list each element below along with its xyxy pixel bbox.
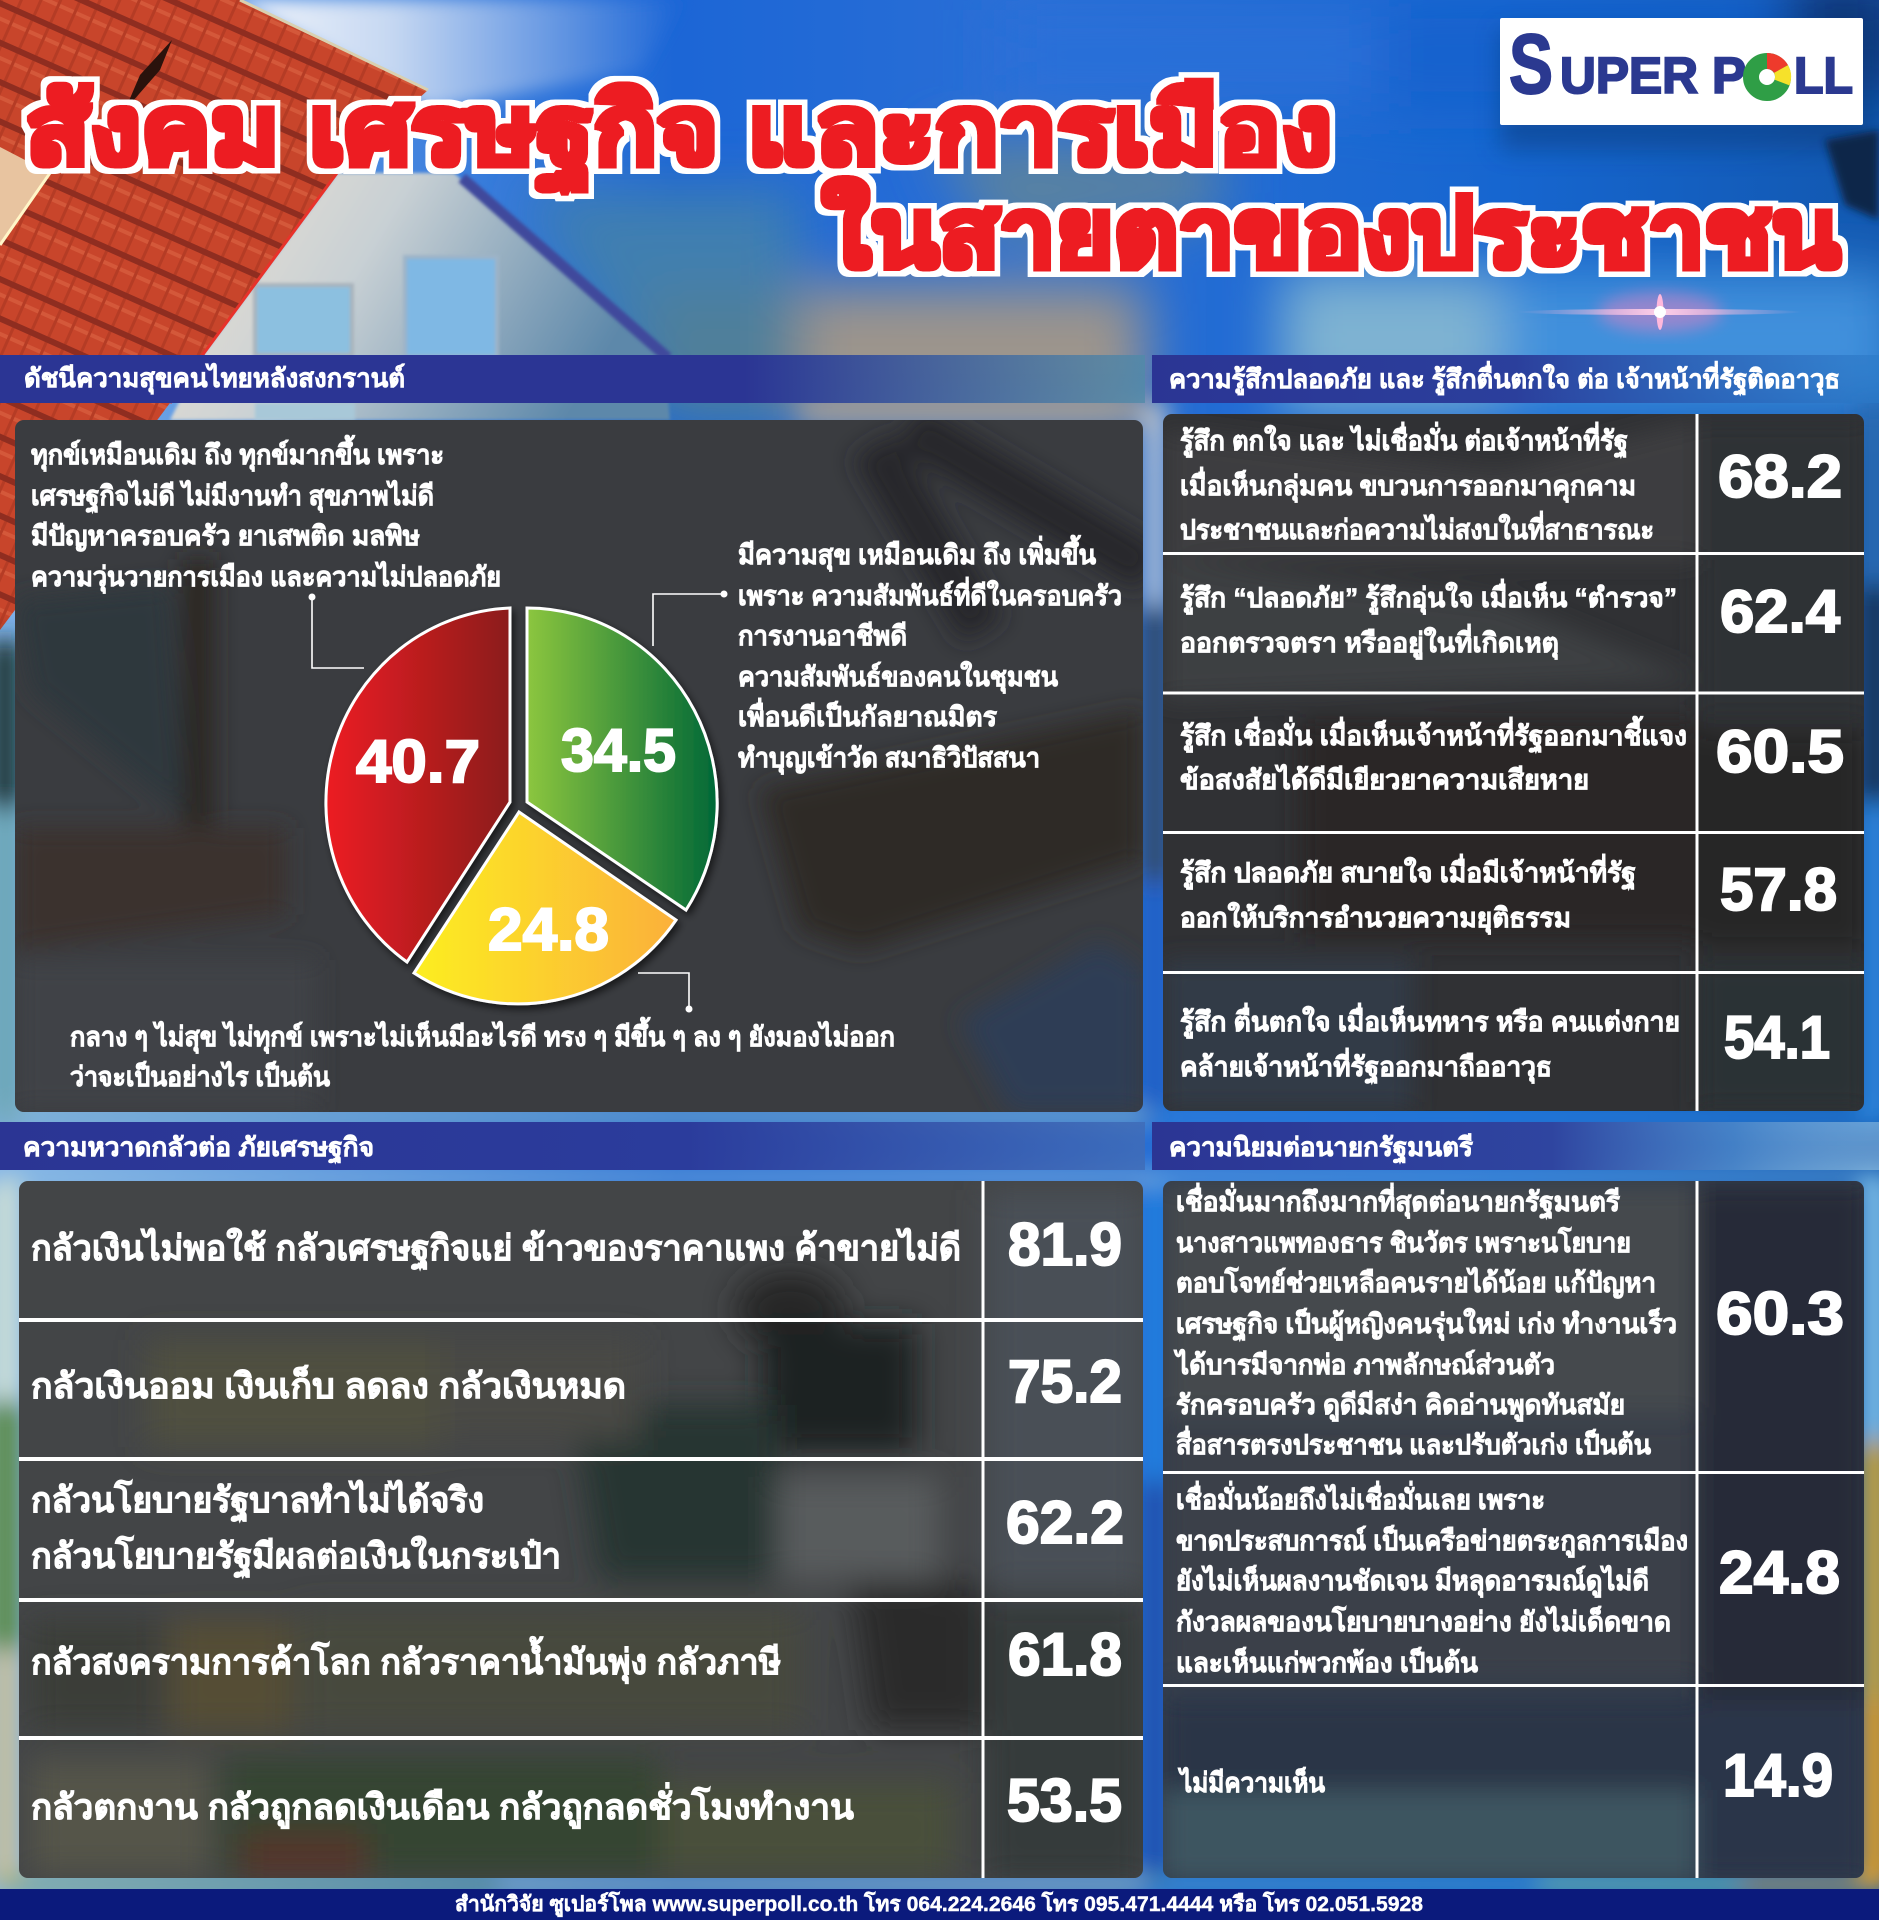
row: not confident 24.8: และเห็นแก่พวกพ้อง เป็นต้น xyxy=(1176,1645,1479,1678)
heading: happiness index xyxy=(0,355,1145,403)
row: 68.2: ประชาชนและก่อความไม่สงบในที่สาธารณะ xyxy=(1180,510,1654,545)
row: 75.2: กลัวเงินออม เงินเก็บ ลดลง กลัวเงินหมด xyxy=(31,1364,626,1406)
panel: PM popularity table xyxy=(1163,1181,1867,1880)
row: no opinion 14.9 xyxy=(1177,1742,1833,1809)
row: no opinion 14.9: 14.9 xyxy=(1723,1742,1833,1809)
row: 61.8: 61.8 xyxy=(1008,1621,1122,1688)
row: 75.2 xyxy=(31,1348,1122,1415)
row: confident 60.3 xyxy=(1173,1182,1844,1460)
callout: happy: มีความสุข เหมือนเดิม ถึง เพิ่มขึ้น xyxy=(738,534,1097,572)
row: 68.2: 68.2 xyxy=(1718,443,1842,510)
row: not confident 24.8: กังวลผลของนโยบายบางอย่าง ยังไม่เด็ดขาด xyxy=(1176,1604,1671,1637)
heading: feeling of safety: ความรู้สึกปลอดภัย และ รู้สึกตื่นตกใจ ต่อ เจ้าหน้าที่รัฐติดอาวุธ xyxy=(1169,360,1840,397)
heading: economic fears: ความหวาดกลัวต่อ ภัยเศรษฐกิจ xyxy=(23,1132,374,1165)
row: 53.5 xyxy=(31,1767,1122,1834)
logo: Super Poll: P xyxy=(1712,47,1746,104)
footer: สำนักวิจัย ซูเปอร์โพล www.superpoll.co.th โทร 064.224.2646 โทร 095.471.4444 หรือ โทร 02.051.5928 xyxy=(455,1891,1423,1918)
row: 54.1: รู้สึก ตื่นตกใจ เมื่อเห็นทหาร หรือ คนแต่งกาย xyxy=(1180,1002,1680,1039)
heading: economic fears xyxy=(0,1122,1145,1170)
row: 81.9: กลัวเงินไม่พอใช้ กลัวเศรษฐกิจแย่ ข้าวของราคาแพง ค้าขายไม่ดี xyxy=(31,1227,961,1271)
callout: happy xyxy=(653,534,1122,775)
sparkle xyxy=(1518,292,1802,332)
row: confident 60.3: 60.3 xyxy=(1716,1280,1844,1347)
pie value: 34.5: 34.5 xyxy=(561,717,676,784)
title xyxy=(26,75,1840,288)
row: 60.5: 60.5 xyxy=(1716,718,1844,785)
row: confident 60.3: สื่อสารตรงประชาชน และปรับตัวเก่ง เป็นต้น xyxy=(1176,1425,1651,1460)
panel: economic fears table xyxy=(19,1181,1145,1880)
logo: Super Poll: LL xyxy=(1794,47,1853,104)
heading: feeling of safety xyxy=(1152,355,1879,403)
row: confident 60.3: ได้บารมีจากพ่อ ภาพลักษณ์ส่วนตัว xyxy=(1173,1349,1555,1380)
row: no opinion 14.9: ไม่มีความเห็น xyxy=(1177,1765,1325,1798)
row: 62.2 xyxy=(31,1479,1124,1579)
row: 57.8 xyxy=(1180,853,1837,935)
row: not confident 24.8 xyxy=(1176,1480,1840,1678)
callout: unhappy: มีปัญหาครอบครัว ยาเสพติด มลพิษ xyxy=(31,521,420,552)
callout: happy: ความสัมพันธ์ของคนในชุมชน xyxy=(738,661,1058,694)
row: 54.1: คล้ายเจ้าหน้าที่รัฐออกมาถืออาวุธ xyxy=(1180,1047,1552,1085)
callout: unhappy xyxy=(31,434,501,668)
row: 75.2: 75.2 xyxy=(1008,1348,1122,1415)
panel: happiness index pie xyxy=(15,420,1150,1112)
row: 62.2: 62.2 xyxy=(1006,1489,1124,1556)
callout: happy: เพราะ ความสัมพันธ์ที่ดีในครอบครัว xyxy=(738,576,1122,611)
icon: poll ring xyxy=(1751,61,1783,93)
logo: Super Poll: UPER xyxy=(1560,47,1698,104)
windows xyxy=(255,285,352,355)
row: 53.5: กลัวตกงาน กลัวถูกลดเงินเดือน กลัวถูกลดชั่วโมงทำงาน xyxy=(31,1782,854,1829)
logo: Super Poll: S xyxy=(1509,17,1553,111)
row: confident 60.3: เศรษฐกิจ เป็นผู้หญิงคนรุ่นใหม่ เก่ง ทำงานเร็ว xyxy=(1176,1306,1677,1342)
title: ในสายตาของประชาชน xyxy=(822,178,1840,288)
callout: neutral: ว่าจะเป็นอย่างไร เป็นต้น xyxy=(70,1059,330,1092)
callout: neutral: กลาง ๆ ไม่สุข ไม่ทุกข์ เพราะไม่เห็นมีอะไรดี ทรง ๆ มีขึ้น ๆ ลง ๆ ยังมองไม่ออก xyxy=(70,1016,895,1054)
row: 54.1: 54.1 xyxy=(1724,1004,1830,1071)
row: not confident 24.8: ขาดประสบการณ์ เป็นเครือข่ายตระกูลการเมือง xyxy=(1176,1523,1688,1558)
row: 62.2: กลัวนโยบายรัฐมีผลต่อเงินในกระเป๋า xyxy=(31,1535,561,1579)
row: 81.9: 81.9 xyxy=(1008,1211,1122,1278)
row: 62.4: ออกตรวจตรา หรืออยู่ในที่เกิดเหตุ xyxy=(1180,623,1559,660)
callout: unhappy: ทุกข์เหมือนเดิม ถึง ทุกข์มากขึ้น เพราะ xyxy=(31,434,444,472)
pie value: 40.7: 40.7 xyxy=(356,728,480,795)
row: 61.8 xyxy=(31,1621,1122,1688)
lower strips around panels xyxy=(0,403,1879,1890)
row: 61.8: กลัวสงครามการค้าโลก กลัวราคาน้ำมันพุ่ง กลัวภาษี xyxy=(31,1636,781,1684)
row: 68.2: เมื่อเห็นกลุ่มคน ขบวนการออกมาคุกคาม xyxy=(1180,466,1636,503)
row: confident 60.3: เชื่อมั่นมากถึงมากที่สุดต่อนายกรัฐมนตรี xyxy=(1176,1182,1620,1220)
row: 60.5: รู้สึก เชื่อมั่น เมื่อเห็นเจ้าหน้าที่รัฐออกมาชี้แจง xyxy=(1180,715,1687,754)
row: 62.2: กลัวนโยบายรัฐบาลทำไม่ได้จริง xyxy=(31,1479,484,1523)
title: สังคม เศรษฐกิจ และการเมือง xyxy=(26,75,1332,195)
roof eave stripe xyxy=(462,178,668,358)
callout: happy: เพื่อนดีเป็นกัลยาณมิตร xyxy=(738,697,997,732)
row: 57.8: ออกให้บริการอำนวยความยุติธรรม xyxy=(1180,902,1571,935)
row: 81.9 xyxy=(31,1211,1122,1278)
callout: unhappy: ความวุ่นวายการเมือง และความไม่ปลอดภัย xyxy=(31,561,501,594)
callout: happy: การงานอาชีพดี xyxy=(738,621,907,651)
row: 60.5 xyxy=(1180,715,1844,795)
row: 62.4 xyxy=(1180,578,1841,660)
row: 57.8: รู้สึก ปลอดภัย สบายใจ เมื่อมีเจ้าหน้าที่รัฐ xyxy=(1180,853,1636,891)
row: 68.2: รู้สึก ตกใจ และ ไม่เชื่อมั่น ต่อเจ้าหน้าที่รัฐ xyxy=(1180,421,1628,459)
heading: PM popularity xyxy=(1152,1122,1879,1170)
row: 60.5: ข้อสงสัยได้ดีมีเยียวยาความเสียหาย xyxy=(1180,764,1589,795)
panel: safety table xyxy=(1163,414,1867,1111)
row: not confident 24.8: เชื่อมั่นน้อยถึงไม่เชื่อมั่นเลย เพราะ xyxy=(1176,1480,1545,1515)
row: 62.4: รู้สึก “ปลอดภัย” รู้สึกอุ่นใจ เมื่อเห็น “ตำรวจ” xyxy=(1180,578,1677,615)
chart: pie xyxy=(326,608,717,1004)
heading: PM popularity: ความนิยมต่อนายกรัฐมนตรี xyxy=(1169,1132,1473,1165)
row: confident 60.3: นางสาวแพทองธาร ชินวัตร เพราะนโยบาย xyxy=(1176,1226,1631,1258)
callout: happy: ทำบุญเข้าวัด สมาธิวิปัสสนา xyxy=(738,743,1040,775)
row: confident 60.3: ตอบโจทย์ช่วยเหลือคนรายได้น้อย แก้ปัญหา xyxy=(1176,1266,1656,1299)
row: 62.4: 62.4 xyxy=(1720,578,1841,645)
row: confident 60.3: รักครอบครัว ดูดีมีสง่า คิดอ่านพูดทันสมัย xyxy=(1176,1390,1625,1422)
logo: Super Poll xyxy=(1500,17,1863,125)
row: 53.5: 53.5 xyxy=(1007,1767,1122,1834)
footer xyxy=(0,1889,1879,1920)
row: not confident 24.8: 24.8 xyxy=(1719,1539,1840,1606)
row: 54.1 xyxy=(1180,1002,1830,1085)
pie value: 24.8: 24.8 xyxy=(488,896,609,963)
row: not confident 24.8: ยังไม่เห็นผลงานชัดเจน มีหลุดอารมณ์ดูไม่ดี xyxy=(1176,1563,1649,1598)
heading: happiness index: ดัชนีความสุขคนไทยหลังสงกรานต์ xyxy=(24,362,405,395)
callout: neutral xyxy=(70,973,895,1092)
callout: unhappy: เศรษฐกิจไม่ดี ไม่มีงานทำ สุขภาพไม่ดี xyxy=(31,480,434,514)
row: 57.8: 57.8 xyxy=(1720,856,1837,923)
row: 68.2 xyxy=(1180,421,1842,545)
